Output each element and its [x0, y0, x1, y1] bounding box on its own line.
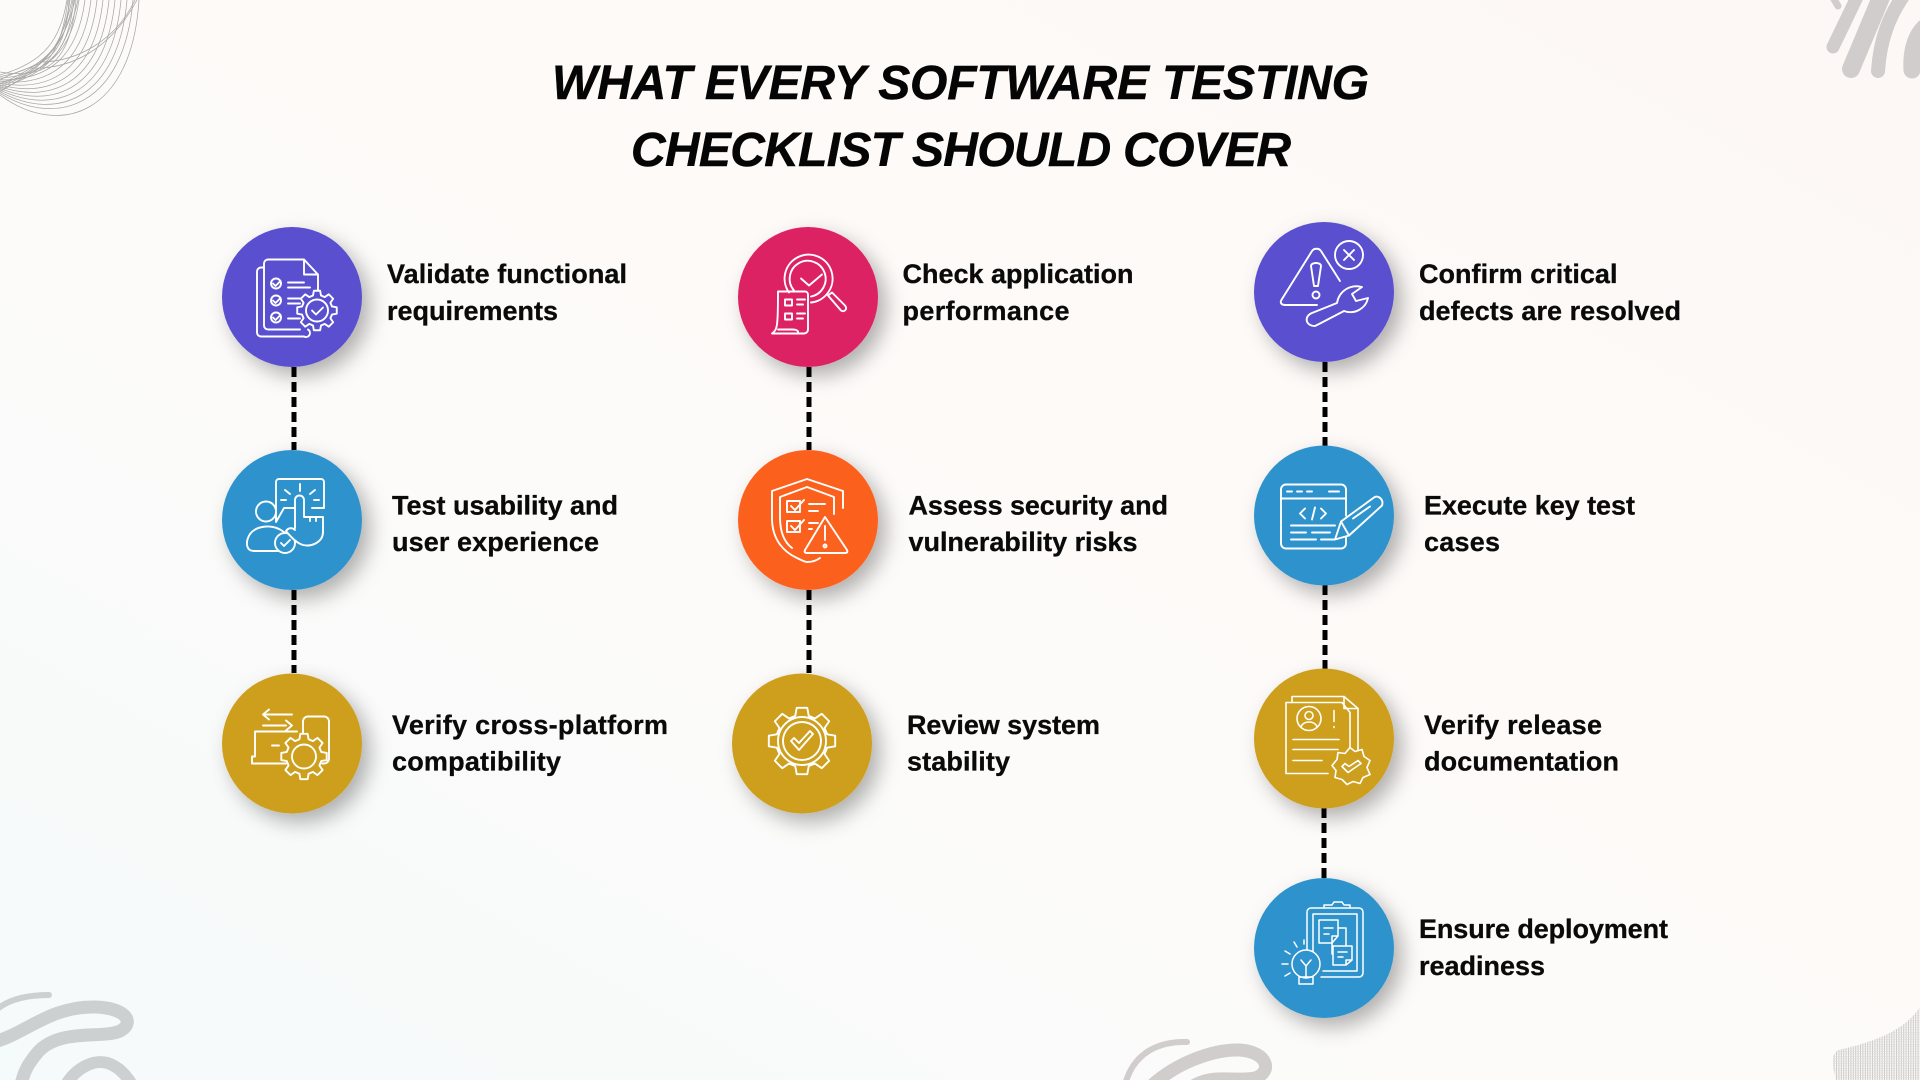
title: CHECKLIST SHOULD COVER [631, 124, 1291, 177]
label [1419, 259, 1681, 326]
icon: document with seal [1286, 696, 1370, 784]
label: vulnerability risks [908, 527, 1138, 557]
label: Assess security and [908, 490, 1168, 520]
item: application performance [738, 227, 1134, 367]
icon: checklist with gear [257, 260, 337, 337]
item: test usability [222, 450, 618, 590]
connector: column 1 [292, 367, 296, 673]
icon: gear with check [769, 708, 835, 774]
icon: user with touch bubble [247, 479, 324, 553]
label: Validate functional [387, 259, 627, 289]
label: readiness [1419, 951, 1545, 981]
label: performance [902, 296, 1070, 326]
label [1424, 490, 1635, 557]
label: Check application [902, 259, 1134, 289]
label: Review system [907, 710, 1100, 740]
item: system stability [732, 674, 1100, 814]
item: critical defects [1254, 222, 1681, 362]
icon: clipboard with notes and bulb [1282, 902, 1363, 984]
title [552, 57, 1369, 177]
connector: column 2 [806, 367, 812, 673]
item: test cases [1254, 446, 1635, 586]
decoration: bottom-left swirl [0, 995, 135, 1080]
item: validate functional requirements [222, 227, 627, 367]
icon: magnifier with report [772, 255, 846, 334]
label [902, 259, 1134, 326]
label: Verify cross-platform [392, 710, 668, 740]
label [392, 490, 618, 557]
label: Confirm critical [1419, 259, 1618, 289]
label: requirements [387, 296, 558, 326]
icon: laptop phone gear [252, 710, 329, 779]
title: WHAT EVERY SOFTWARE TESTING [552, 57, 1369, 110]
label: cases [1424, 527, 1500, 557]
label [1419, 914, 1668, 981]
label: Execute key test [1424, 490, 1635, 520]
item: deployment readiness [1254, 878, 1668, 1018]
label [1424, 710, 1619, 776]
label [908, 490, 1168, 557]
icon: warning with wrench [1281, 241, 1368, 326]
label: documentation [1424, 746, 1619, 776]
label: Ensure deployment [1419, 914, 1668, 944]
icon: shield with warning [772, 479, 847, 562]
item: cross-platform [222, 674, 668, 814]
label [387, 259, 627, 326]
decoration: top-left line mesh [0, 0, 139, 115]
icon: code window with pencil [1281, 484, 1382, 548]
label: Test usability and [392, 490, 618, 520]
item: release documentation [1254, 668, 1619, 808]
label [907, 710, 1100, 776]
label: stability [907, 746, 1010, 776]
label: compatibility [392, 746, 561, 776]
decoration: bottom-centre swirl [1124, 1042, 1266, 1080]
decoration: bottom-right line mesh [1833, 1007, 1920, 1080]
label: user experience [392, 527, 599, 557]
label: Verify release [1424, 710, 1602, 740]
item: security risks [738, 450, 1168, 590]
connector: column 3 [1324, 362, 1325, 878]
label: defects are resolved [1419, 296, 1681, 326]
decoration: top-right rounded strokes [1832, 0, 1920, 71]
label [392, 710, 668, 776]
